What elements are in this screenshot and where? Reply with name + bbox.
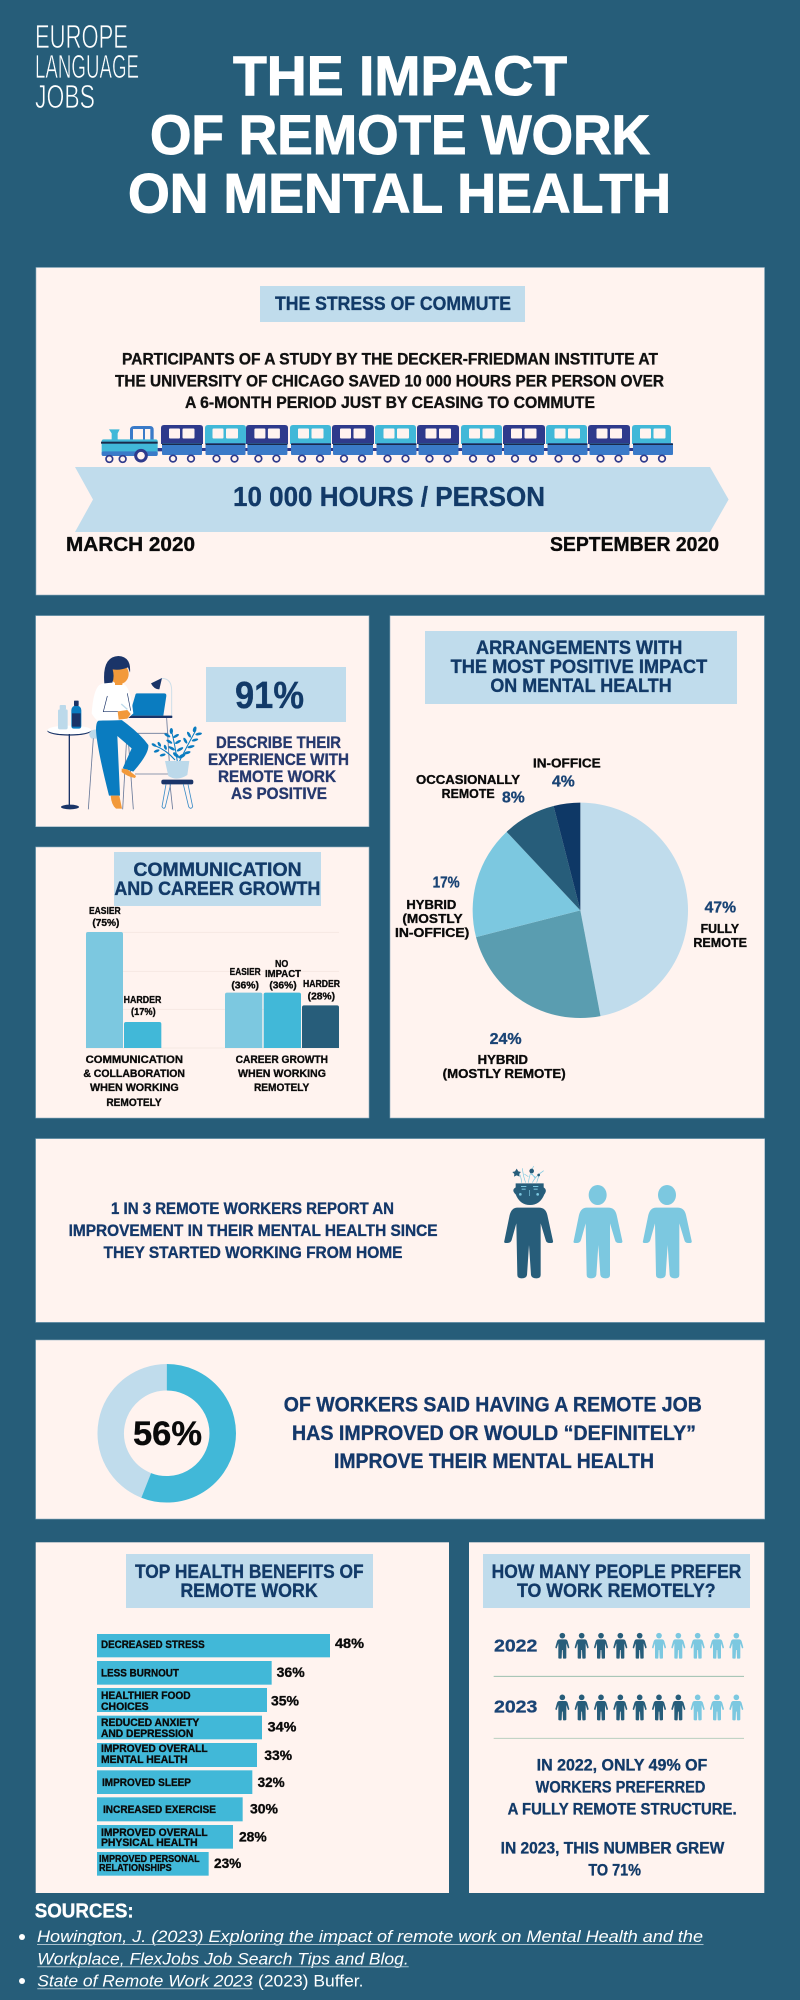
text: 2022 and 2023 preferences: IN 2022, ONLY 49% OF: [537, 1755, 707, 1774]
bar chart: top health benefits: MENTAL HEALTH: [101, 1754, 188, 1766]
text: workers said remote job improved mental health: HAS IMPROVED OR WOULD “DEFINITELY”: [292, 1422, 696, 1445]
category label: career growth: REMOTELY: [254, 1082, 310, 1094]
category label: career growth: WHEN WORKING: [238, 1068, 326, 1080]
icon: train: [101, 425, 673, 462]
category label: career growth: CAREER GROWTH: [236, 1054, 328, 1066]
source list: Howington, J. (2023) Exploring the impact of remote work on Mental Health and the: [37, 1927, 703, 1946]
slice: fully remote 47%: [580, 803, 688, 1016]
icon: woman working at laptop: [47, 656, 202, 809]
title: ON MENTAL HEALTH: [128, 162, 671, 224]
heading: arrangements: THE MOST POSITIVE IMPACT: [451, 657, 708, 678]
text: describe their experience: AS POSITIVE: [231, 785, 327, 803]
text: 2022 and 2023 preferences: TO 71%: [588, 1860, 641, 1879]
pictogram row: 2022: [494, 1633, 743, 1659]
heading: top health benefits: [126, 1554, 373, 1608]
bar value labels: (75%): [92, 918, 119, 929]
bar value labels: (28%): [308, 991, 335, 1002]
pie labels: HYBRID: [406, 897, 456, 912]
pie labels: FULLY: [701, 921, 739, 936]
icon: person: [573, 1185, 622, 1278]
pie labels: REMOTE: [442, 786, 495, 801]
pie labels: HYBRID: [478, 1052, 528, 1067]
donut chart: 56%: [111, 1377, 223, 1489]
label: march 2020: MARCH 2020: [66, 534, 195, 556]
bar chart: top health benefits: 33%: [264, 1748, 292, 1763]
heading: how many people prefer: HOW MANY PEOPLE PREFER: [492, 1562, 742, 1583]
bar chart: top health benefits: 23%: [214, 1856, 241, 1871]
source list: [19, 1927, 704, 1990]
source list: Workplace, FlexJobs Job Search Tips and Blog.: [37, 1949, 409, 1968]
bar chart: top health benefits: 32%: [258, 1775, 285, 1790]
text: describe their experience: EXPERIENCE WITH: [208, 751, 349, 769]
category label: career growth: [236, 1054, 328, 1094]
text: commute study: A 6-MONTH PERIOD JUST BY CEASING TO COMMUTE: [185, 394, 595, 412]
bar chart: top health benefits: 36%: [277, 1665, 305, 1680]
pictogram row: 2023: 2023: [494, 1697, 537, 1717]
text: 2022 and 2023 preferences: WORKERS PREFERRED: [536, 1777, 705, 1796]
heading: arrangements: ARRANGEMENTS WITH: [476, 638, 682, 659]
logo: Europe Language Jobs: LANGUAGE: [35, 48, 139, 85]
icon: person: [643, 1185, 692, 1278]
panel: communication and career growth: [36, 847, 369, 1118]
text: describe their experience: REMOTE WORK: [218, 768, 336, 786]
bar value labels: (36%): [231, 980, 259, 991]
pie labels: IN-OFFICE): [395, 925, 469, 940]
bar: career no impact 36%: [264, 993, 301, 1048]
pictogram row: 2023: [494, 1694, 743, 1720]
category label: communication and collaboration: REMOTELY: [106, 1097, 162, 1109]
heading: top health benefits: REMOTE WORK: [180, 1581, 318, 1602]
text: 2022 and 2023 preferences: IN 2023, THIS NUMBER GREW: [501, 1838, 725, 1857]
bar chart: top health benefits: AND DEPRESSION: [101, 1728, 193, 1740]
text: 1 in 3 remote workers: 1 IN 3 REMOTE WORKERS REPORT AN: [111, 1199, 394, 1218]
heading: how many people prefer: TO WORK REMOTELY?: [517, 1581, 716, 1602]
text: 1 in 3 remote workers: THEY STARTED WORKING FROM HOME: [104, 1243, 402, 1262]
pie labels: IN-OFFICE: [533, 756, 601, 771]
bar chart: top health benefits: IMPROVED PERSONAL: [99, 1854, 200, 1865]
bar chart: top health benefits: CHOICES: [101, 1701, 149, 1713]
logo: Europe Language Jobs: [35, 18, 139, 115]
pie labels: 8%: [502, 790, 525, 807]
panel: the stress of commute: [36, 268, 764, 595]
title: OF REMOTE WORK: [150, 103, 650, 166]
heading: top health benefits: TOP HEALTH BENEFITS OF: [135, 1562, 364, 1583]
text: workers said remote job improved mental health: IMPROVE THEIR MENTAL HEALTH: [334, 1450, 654, 1473]
text: commute study: [115, 351, 664, 412]
pie labels: 4%: [552, 774, 575, 791]
heading: the stress of commute: THE STRESS OF COMMUTE: [275, 294, 511, 315]
heading: communication and career growth: AND CAREER GROWTH: [114, 879, 320, 900]
pie labels: 24%: [490, 1031, 522, 1048]
bar chart: top health benefits: IMPROVED OVERALL: [101, 1827, 208, 1839]
donut chart: 56%: 56%: [133, 1415, 202, 1453]
heading: sources: SOURCES:: [35, 1900, 134, 1922]
bar value labels: (36%): [269, 980, 297, 991]
bar chart: top health benefits: 35%: [271, 1694, 299, 1709]
bar chart: top health benefits: DECREASED STRESS: [101, 1639, 205, 1651]
icon: locomotive: [101, 426, 162, 462]
text: 1 in 3 remote workers: IMPROVEMENT IN THEIR MENTAL HEALTH SINCE: [69, 1221, 438, 1240]
text: workers said remote job improved mental health: OF WORKERS SAID HAVING A REMOTE JOB: [284, 1394, 702, 1417]
bar chart: top health benefits: IMPROVED OVERALL: [101, 1743, 208, 1755]
category label: communication and collaboration: [83, 1054, 185, 1109]
slice: hybrid mostly in-office 17%: [473, 832, 580, 937]
arrow banner: 10 000 hours per person: [75, 467, 729, 532]
panel: arrangements with the most positive impact: [390, 616, 764, 1118]
bar chart: top health benefits: INCREASED EXERCISE: [103, 1804, 216, 1816]
bar value labels: HARDER: [303, 979, 340, 990]
pie labels: 47%: [705, 900, 736, 917]
bar chart: top health benefits: IMPROVED SLEEP: [102, 1777, 191, 1789]
heading: arrangements: ON MENTAL HEALTH: [490, 676, 672, 697]
text: 2022 and 2023 preferences: [501, 1755, 737, 1879]
text: commute study: THE UNIVERSITY OF CHICAGO SAVED 10 000 HOURS PER PERSON OVER: [115, 372, 664, 390]
heading: communication and career growth: COMMUNICATION: [133, 860, 302, 881]
bar value labels: (17%): [131, 1007, 156, 1018]
pie labels: [395, 756, 747, 1081]
bar chart: top health benefits: [97, 1554, 373, 1876]
bar chart: top health benefits: 30%: [250, 1802, 278, 1817]
pie labels: OCCASIONALLY: [416, 772, 520, 787]
text: 1 in 3 remote workers: [69, 1199, 438, 1262]
bar chart: top health benefits: 48%: [335, 1636, 364, 1651]
bar chart: top health benefits: 34%: [268, 1720, 296, 1735]
category label: communication and collaboration: WHEN WORKING: [90, 1082, 179, 1094]
pie labels: REMOTE: [693, 935, 747, 950]
bar chart: top health benefits: HEALTHIER FOOD: [101, 1690, 191, 1702]
bar value labels: [89, 906, 340, 1018]
sources: [19, 1900, 704, 1990]
bar value labels: EASIER: [230, 967, 261, 978]
category label: communication and collaboration: & COLLABORATION: [83, 1068, 185, 1080]
text: 2022 and 2023 preferences: A FULLY REMOTE STRUCTURE.: [508, 1799, 737, 1818]
stat: 91%: 91%: [235, 675, 304, 717]
heading: how many people prefer: [483, 1554, 750, 1608]
panel: 56% of workers: [36, 1340, 765, 1519]
pie chart: arrangements: [395, 631, 747, 1081]
bar chart: top health benefits: REDUCED ANXIETY: [101, 1717, 200, 1729]
text: workers said remote job improved mental health: [284, 1394, 702, 1473]
bar chart: top health benefits: LESS BURNOUT: [101, 1667, 179, 1679]
bar chart: top health benefits: PHYSICAL HEALTH: [101, 1837, 198, 1849]
icon: three people, one with flowers growing from head: [504, 1166, 692, 1278]
pie labels: (MOSTLY: [402, 911, 463, 926]
bar: communication harder 17%: [124, 1022, 161, 1048]
title: [128, 44, 671, 224]
bar: communication easier 75%: [86, 932, 123, 1048]
pie labels: 17%: [433, 874, 460, 891]
bar chart: communication and career growth: [83, 852, 340, 1109]
slice: occasionally remote 8%: [507, 806, 580, 910]
bar value labels: IMPACT: [265, 969, 302, 980]
bar value labels: NO: [275, 959, 288, 970]
heading: the stress of commute: [260, 286, 525, 322]
panel: 91% positive experience: [36, 616, 369, 827]
bar: career harder 28%: [302, 1005, 339, 1048]
slice: in-office 4%: [554, 803, 580, 910]
text: describe their experience: [208, 734, 349, 803]
bar chart: top health benefits: RELATIONSHIPS: [99, 1863, 172, 1874]
pictogram row: 2022: 2022: [494, 1636, 537, 1656]
icon: person with flowers: [504, 1166, 553, 1278]
label: september 2020: SEPTEMBER 2020: [550, 534, 719, 556]
panel: how many people prefer to work remotely: [469, 1542, 764, 1893]
panel: top health benefits of remote work: [36, 1542, 449, 1893]
text: describe their experience: DESCRIBE THEIR: [216, 734, 341, 752]
bar value labels: HARDER: [124, 995, 162, 1006]
logo: Europe Language Jobs: EUROPE: [35, 18, 128, 55]
source list: State of Remote Work 2023: [37, 1971, 253, 1990]
text: commute study: PARTICIPANTS OF A STUDY BY THE DECKER-FRIEDMAN INSTITUTE AT: [122, 351, 658, 369]
category label: communication and collaboration: COMMUNICATION: [86, 1054, 183, 1066]
stat: 91%: [206, 667, 346, 722]
bar chart: top health benefits: 28%: [239, 1830, 267, 1845]
heading: arrangements: [425, 631, 737, 704]
title: THE IMPACT: [233, 44, 567, 107]
source list: (2023) Buffer.: [258, 1971, 364, 1990]
pie labels: (MOSTLY REMOTE): [443, 1066, 566, 1081]
arrow banner: 10 000 hours per person: 10 000 HOURS / PERSON: [233, 481, 545, 512]
heading: communication and career growth: [114, 852, 321, 906]
bar value labels: EASIER: [89, 906, 121, 917]
slice: hybrid mostly remote 24%: [476, 910, 600, 1018]
panel: 1 in 3 remote workers: [36, 1139, 765, 1322]
bar: career easier 36%: [225, 993, 262, 1048]
logo: Europe Language Jobs: JOBS: [35, 78, 95, 115]
